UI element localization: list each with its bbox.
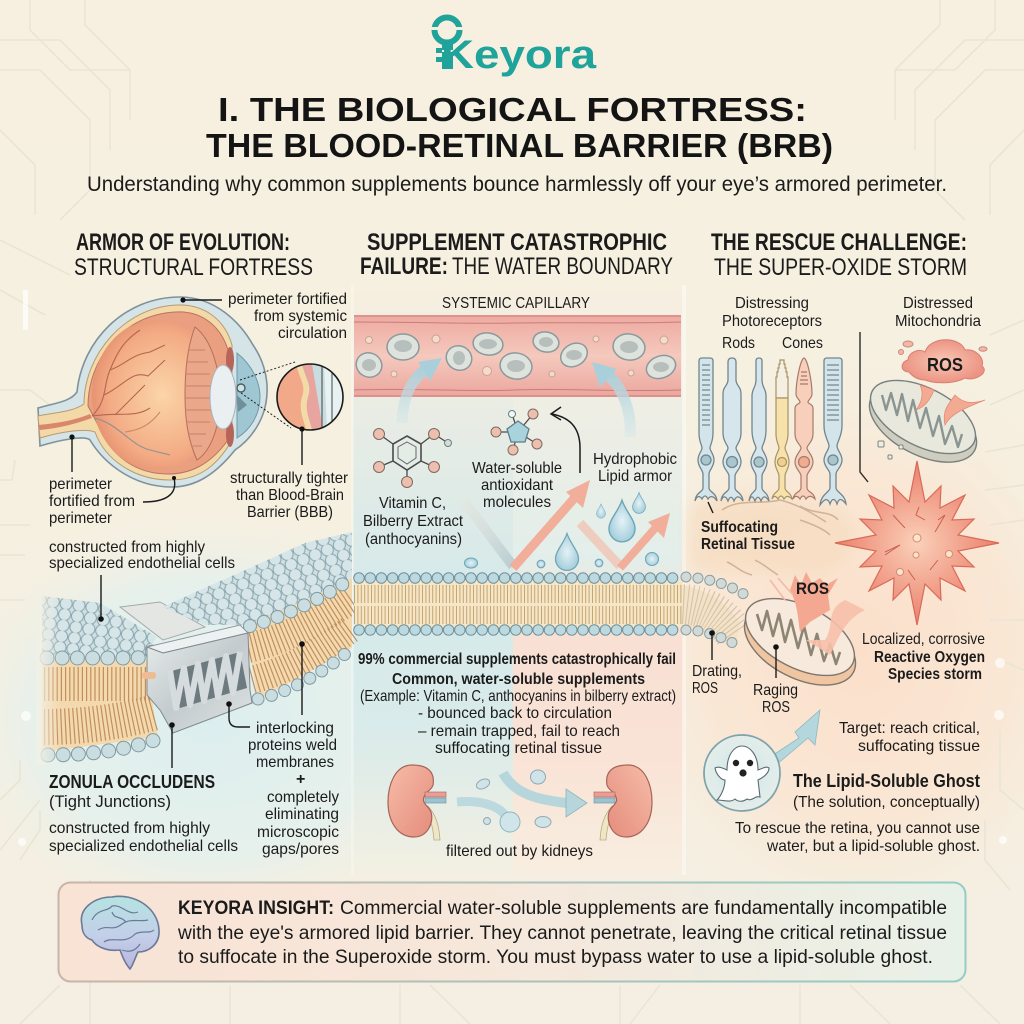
text: lipid-soluble ghost (735, 771, 980, 855)
callout: interlocking proteins: gaps/pores (262, 841, 339, 858)
text: water-soluble antioxidant molecules (472, 460, 562, 511)
cone 2 (793, 358, 815, 499)
logo: Keyora: Keyora (441, 33, 597, 77)
text: supplements fail (358, 651, 676, 757)
photoreceptor cells (695, 358, 846, 505)
label: systemic capillary: SYSTEMIC CAPILLARY (442, 295, 590, 312)
membrane with tight junction (36, 532, 352, 768)
rod 4 (820, 358, 846, 505)
arrow: black redirect (551, 407, 580, 473)
text: hydrophobic lipid armor: Hydrophobic (593, 451, 677, 468)
heading: supplement catastrophic failure: SUPPLEMENT CATASTROPHIC (367, 229, 667, 256)
callout: zonula occludens: specialized endothelial cells (49, 838, 238, 855)
labels: photoreceptors: Cones (782, 335, 823, 352)
panel: Keyora insight callout (58, 882, 966, 982)
icon: raging mitochondrion with ROS: ROS (796, 579, 829, 598)
insight text (177, 898, 947, 968)
text: vitamin C, bilberry extract: (anthocyanins) (365, 531, 462, 548)
rod 1 (695, 358, 717, 501)
callout: perimeter fortified from systemic circulation: from systemic (254, 308, 347, 325)
panel: supplement catastrophic failure (352, 229, 683, 860)
callout: zonula occludens (49, 772, 238, 855)
labels: photoreceptors: Photoreceptors (722, 313, 822, 330)
icon: brain (81, 896, 159, 969)
heading: armor of evolution: ARMOR OF EVOLUTION: (76, 229, 290, 256)
callout: zonula occludens: constructed from highly (49, 820, 210, 837)
callout: zonula occludens: (Tight Junctions) (49, 792, 171, 811)
text: localized corrosive ROS storm (862, 631, 985, 683)
molecule dots (475, 770, 551, 828)
subtitle: Understanding why common supplements bounce harmlessly off your eye’s armored perimeter. (87, 173, 947, 196)
text: lipid-soluble ghost: To rescue the retina, you cannot use (735, 820, 980, 837)
callout: interlocking proteins: eliminating (265, 806, 339, 823)
text: lipid-soluble ghost: The Lipid-Soluble Ghost (793, 771, 980, 791)
arrow: small bounce V (580, 513, 670, 568)
insight text: with the eye's armored lipid barrier. They cannot penetrate, leaving the critical retinal tissue (177, 923, 947, 944)
rod 2 (721, 358, 743, 501)
callout: zonula occludens: ZONULA OCCLUDENS (49, 772, 215, 792)
lipid membrane barrier (354, 578, 683, 630)
arrow: ghost to target (770, 710, 820, 765)
callout: raging ROS: ROS (762, 699, 790, 716)
insight text: Commercial water-soluble supplements are fundamentally incompatible (340, 898, 947, 919)
text: water-soluble antioxidant molecules: antioxidant (481, 477, 554, 494)
text: target (839, 720, 980, 755)
callout: interlocking proteins: membranes (256, 754, 334, 771)
text: supplements fail: (Example: Vitamin C, anthocyanins in bilberry extract) (360, 688, 676, 705)
heading: rescue challenge: THE RESCUE CHALLENGE: (711, 229, 967, 256)
text: water-soluble antioxidant molecules: molecules (483, 494, 551, 511)
membrane fragment (683, 577, 752, 650)
callout: structurally tighter than BBB: Barrier (BBB) (247, 504, 333, 521)
callout: perimeter fortified from perimeter: fortified from (49, 493, 135, 510)
icon: antioxidant molecule (491, 409, 542, 455)
insight text: KEYORA INSIGHT: (178, 898, 334, 919)
heading: armor of evolution (74, 229, 313, 281)
callout: interlocking proteins: microscopic (257, 824, 339, 841)
text: vitamin C, bilberry extract: Bilberry Extract (363, 513, 464, 530)
callout: structurally tighter than BBB: than Blood-Brain (236, 487, 344, 504)
heading: rescue challenge (711, 229, 967, 281)
label: filtered out by kidneys: filtered out by kidneys (446, 843, 593, 860)
icon: vitamin C molecule (374, 428, 452, 488)
callout: drating ROS: ROS (692, 680, 718, 697)
callout: constructed from endothelial cells (top): specialized endothelial cells (49, 555, 235, 572)
text: hydrophobic lipid armor: Lipid armor (598, 468, 673, 485)
text: supplements fail: 99% commercial supplements catastrophically fail (358, 651, 676, 668)
labels: distressed mitochondria (895, 295, 981, 330)
heading: armor of evolution: STRUCTURAL FORTRESS (74, 254, 313, 281)
callout: interlocking proteins: interlocking (256, 720, 334, 737)
callout: interlocking proteins: proteins weld (248, 737, 337, 754)
text: localized corrosive ROS storm: Localized, corrosive (862, 631, 985, 648)
callout: perimeter fortified from systemic circulation (180, 291, 347, 342)
retinal tissue (690, 496, 854, 575)
callout: raging ROS: Raging (753, 682, 798, 699)
text: lipid-soluble ghost: (The solution, conceptually) (793, 794, 980, 811)
arrow: bounce to capillary left (402, 358, 442, 423)
cone 1 (772, 360, 792, 499)
icon: water droplets (464, 493, 658, 570)
title: I. THE BIOLOGICAL FORTRESS: (218, 91, 807, 128)
labels: distressed mitochondria: Distressed (903, 295, 973, 312)
label: suffocating retinal tissue: Suffocating (701, 519, 778, 536)
arrow: large bounce V (463, 480, 590, 568)
callout: drating ROS (692, 630, 742, 697)
text: target: suffocating tissue (858, 738, 980, 755)
labels: photoreceptors (722, 295, 823, 352)
arrow: bounce to capillary right (592, 362, 630, 437)
icon: distressed mitochondrion with ROS cloud: ROS (927, 355, 963, 375)
text: lipid-soluble ghost: water, but a lipid-soluble ghost. (766, 838, 980, 855)
heading: supplement catastrophic failure: THE WATER BOUNDARY (452, 253, 673, 280)
callout: perimeter fortified from perimeter: perimeter (49, 476, 113, 493)
metal tight junction (142, 625, 252, 733)
capillary with blood cells (352, 315, 681, 397)
labels: photoreceptors: Rods (722, 335, 755, 352)
arrow: filtered flow (457, 773, 587, 832)
text: supplements fail: Common, water-soluble supplements (392, 671, 645, 688)
right membrane piece (163, 532, 352, 700)
text: vitamin C, bilberry extract: Vitamin C, (379, 495, 446, 512)
text: supplements fail: – remain trapped, fail to reach (418, 723, 620, 740)
label: suffocating retinal tissue: Retinal Tissue (701, 536, 795, 553)
icon: left kidney (388, 765, 446, 840)
leaders for membrane (101, 575, 302, 768)
grey plate (120, 602, 205, 640)
tissue cracks (722, 500, 838, 575)
icon: ROS starburst (835, 461, 999, 625)
title: THE BLOOD-RETINAL BARRIER (BRB) (206, 127, 833, 164)
callout: constructed from endothelial cells (top): constructed from highly (49, 539, 205, 556)
logo: Keyora (430, 18, 597, 77)
callout: perimeter fortified from perimeter: perimeter (49, 510, 113, 527)
text: hydrophobic lipid armor (593, 451, 677, 485)
text: supplements fail: suffocating retinal tissue (435, 740, 602, 757)
callout: interlocking proteins: completely (267, 789, 339, 806)
icon: raging mitochondrion with ROS (732, 572, 868, 702)
icon: right kidney (594, 765, 652, 840)
callout: raging ROS (753, 644, 798, 716)
divider leader (860, 332, 868, 482)
text: vitamin C, bilberry extract (363, 495, 464, 548)
text: localized corrosive ROS storm: Reactive Oxygen (874, 649, 985, 666)
callout: interlocking proteins (248, 720, 339, 858)
rod 3 (749, 358, 769, 501)
callout: interlocking proteins: + (296, 771, 305, 788)
text: supplements fail: - bounced back to circulation (418, 705, 612, 722)
label: suffocating retinal tissue (701, 502, 795, 553)
callout: drating ROS: Drating, (692, 663, 742, 680)
icon: distressed mitochondrion with ROS cloud (857, 340, 989, 478)
insight text: to suffocate in the Superoxide storm. You must bypass water to use a lipid-soluble ghost. (178, 947, 933, 968)
heading: supplement catastrophic failure: FAILURE: (360, 253, 448, 280)
illustration: kidneys filtering (388, 765, 652, 840)
icon: lipid-soluble ghost (704, 735, 780, 811)
text: localized corrosive ROS storm: Species storm (888, 666, 982, 683)
panel: armor of evolution (36, 229, 352, 858)
labels: distressed mitochondria: Mitochondria (895, 313, 981, 330)
text: water-soluble antioxidant molecules: Water-soluble (472, 460, 562, 477)
callout: structurally tighter than BBB (230, 426, 349, 521)
callout: perimeter fortified from systemic circulation: perimeter fortified (228, 291, 347, 308)
text: target: Target: reach critical, (839, 720, 980, 737)
left membrane piece (36, 590, 166, 765)
labels: photoreceptors: Distressing (735, 295, 809, 312)
panel: the rescue challenge (683, 229, 999, 855)
callout: structurally tighter than BBB: structurally tighter (230, 470, 349, 487)
heading: supplement catastrophic failure (360, 229, 673, 280)
inset magnifier (277, 364, 345, 430)
callout: perimeter fortified from systemic circulation: circulation (278, 325, 347, 342)
heading: rescue challenge: THE SUPER-OXIDE STORM (714, 254, 967, 281)
title (206, 91, 833, 164)
callout: constructed from endothelial cells (top) (49, 539, 235, 572)
callout: perimeter fortified from perimeter (49, 434, 176, 527)
eye cross-section diagram (38, 297, 345, 487)
